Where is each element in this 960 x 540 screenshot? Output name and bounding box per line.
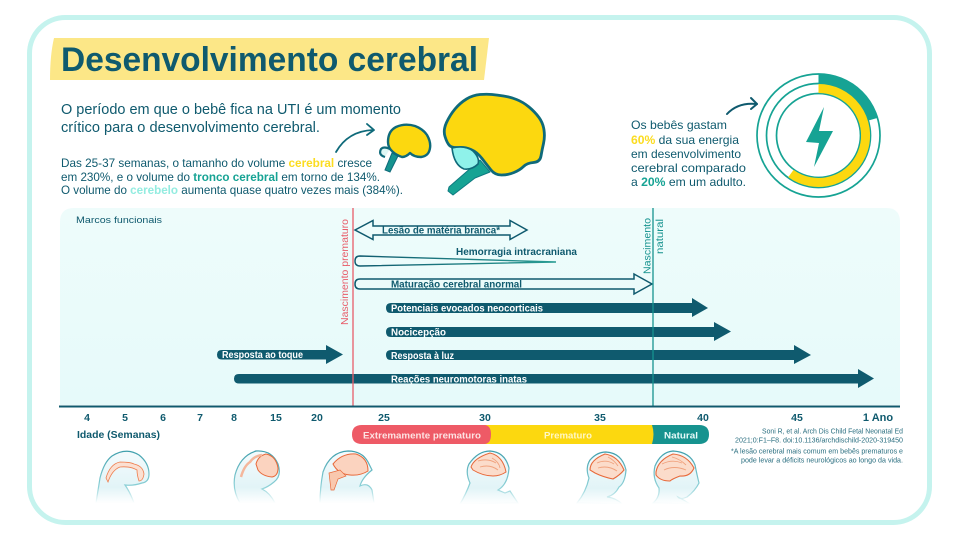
natural birth marker [642,208,666,406]
growth text: em 230%, e o volume do tronco cerebral em torno de 134%. [61,170,380,184]
illustration: embryo week 5 [96,451,149,503]
timeline axis: 8 [231,412,237,424]
growth text: Das 25-37 semanas, o tamanho do volume cerebral cresce [61,156,372,170]
timeline axis: 1 Ano [863,412,893,424]
timeline axis: 45 [791,412,803,424]
citation [735,428,903,444]
timeline axis: 35 [594,412,606,424]
illustration: fetus week 15 [234,451,279,503]
energy text: cerebral comparado [631,161,746,175]
growth text [61,156,403,197]
arrow: resposta à luz: Resposta à luz [391,351,454,362]
arrow: potenciais evocados neocorticais [386,298,708,317]
arrow: hemorragia intracraniana [355,247,577,266]
timeline axis: 4 [84,412,90,424]
illustration: fetus week 35 [577,452,626,504]
arrow: reações neuromotoras inatas: Reações neuromotoras inatas [391,374,527,386]
timeline axis: 25 [378,412,390,424]
timeline axis: 20 [311,412,323,424]
prematurity scale bar [352,425,709,444]
illustration: fetus week 30 [460,451,518,504]
timeline axis: 30 [479,412,491,424]
illustration: fetus week 20 [320,451,374,503]
arrow to small brain [336,124,374,152]
arrow: hemorragia intracraniana: Hemorragia intracraniana [456,247,577,258]
prematurity scale bar: Extremamente prematuro [363,430,481,442]
icon: energy ring with bolt [757,74,880,197]
footnote: *A lesão cerebral mais comum em bebês prematuros e [731,448,903,456]
timeline axis [59,406,900,424]
arrow to energy ring [727,98,757,114]
footnote [731,448,903,464]
arrow: potenciais evocados neocorticais: Potenciais evocados neocorticais [391,304,543,314]
arrow: maturação cerebral anormal [355,274,652,294]
illustration: newborn [653,451,699,504]
growth text: O volume do cerebelo aumenta quase quatro vezes mais (384%). [61,183,403,197]
timeline axis: 5 [122,412,128,424]
arrow: nocicepção [386,322,731,341]
natural birth marker: Nascimento [642,218,654,274]
energy text: Os bebês gastam [631,118,727,132]
intro text: crítico para o desenvolvimento cerebral. [61,120,320,136]
arrow: maturação cerebral anormal: Maturação cerebral anormal [391,280,522,290]
arrow: reações neuromotoras inatas [234,369,874,388]
prematurity scale bar: Prematuro [544,430,592,442]
citation: 2021;0:F1–F8. doi:10.1136/archdischild-2020-319450 [735,438,903,444]
arrow: nocicepção: Nocicepção [391,328,446,338]
intro text [61,102,401,136]
prematurity scale bar: Natural [664,430,698,442]
energy text: a 20% em um adulto. [631,175,746,189]
title: Desenvolvimento cerebral [61,41,478,79]
timeline axis: 40 [697,412,709,424]
timeline axis: 7 [197,412,203,424]
intro text: O período em que o bebê fica na UTI é um momento [61,102,401,118]
panel label: Marcos funcionais [76,215,162,226]
natural birth marker: natural [655,219,666,254]
footnote: pode levar a déficits neurológicos ao longo da vida. [741,458,903,464]
arrow: resposta ao toque: Resposta ao toque [222,350,303,361]
arrow: resposta à luz [386,345,811,364]
energy text: em desenvolvimento [631,147,741,161]
icon: small brain [380,125,430,172]
premature birth marker: Nascimento prematuro [340,219,351,325]
citation: Soni R, et al. Arch Dis Child Fetal Neonatal Ed [762,428,903,436]
energy text [631,118,746,189]
axis title: Idade (Semanas) [77,429,160,441]
arrow: lesão de matéria branca [355,220,527,240]
arrow: resposta ao toque [217,345,343,364]
arrow: lesão de matéria branca: Lesão de matéria branca* [382,226,500,236]
energy text: 60% da sua energia [631,133,739,147]
timeline axis: 6 [160,412,166,424]
icon: large brain [444,94,544,195]
timeline axis: 15 [270,412,282,424]
